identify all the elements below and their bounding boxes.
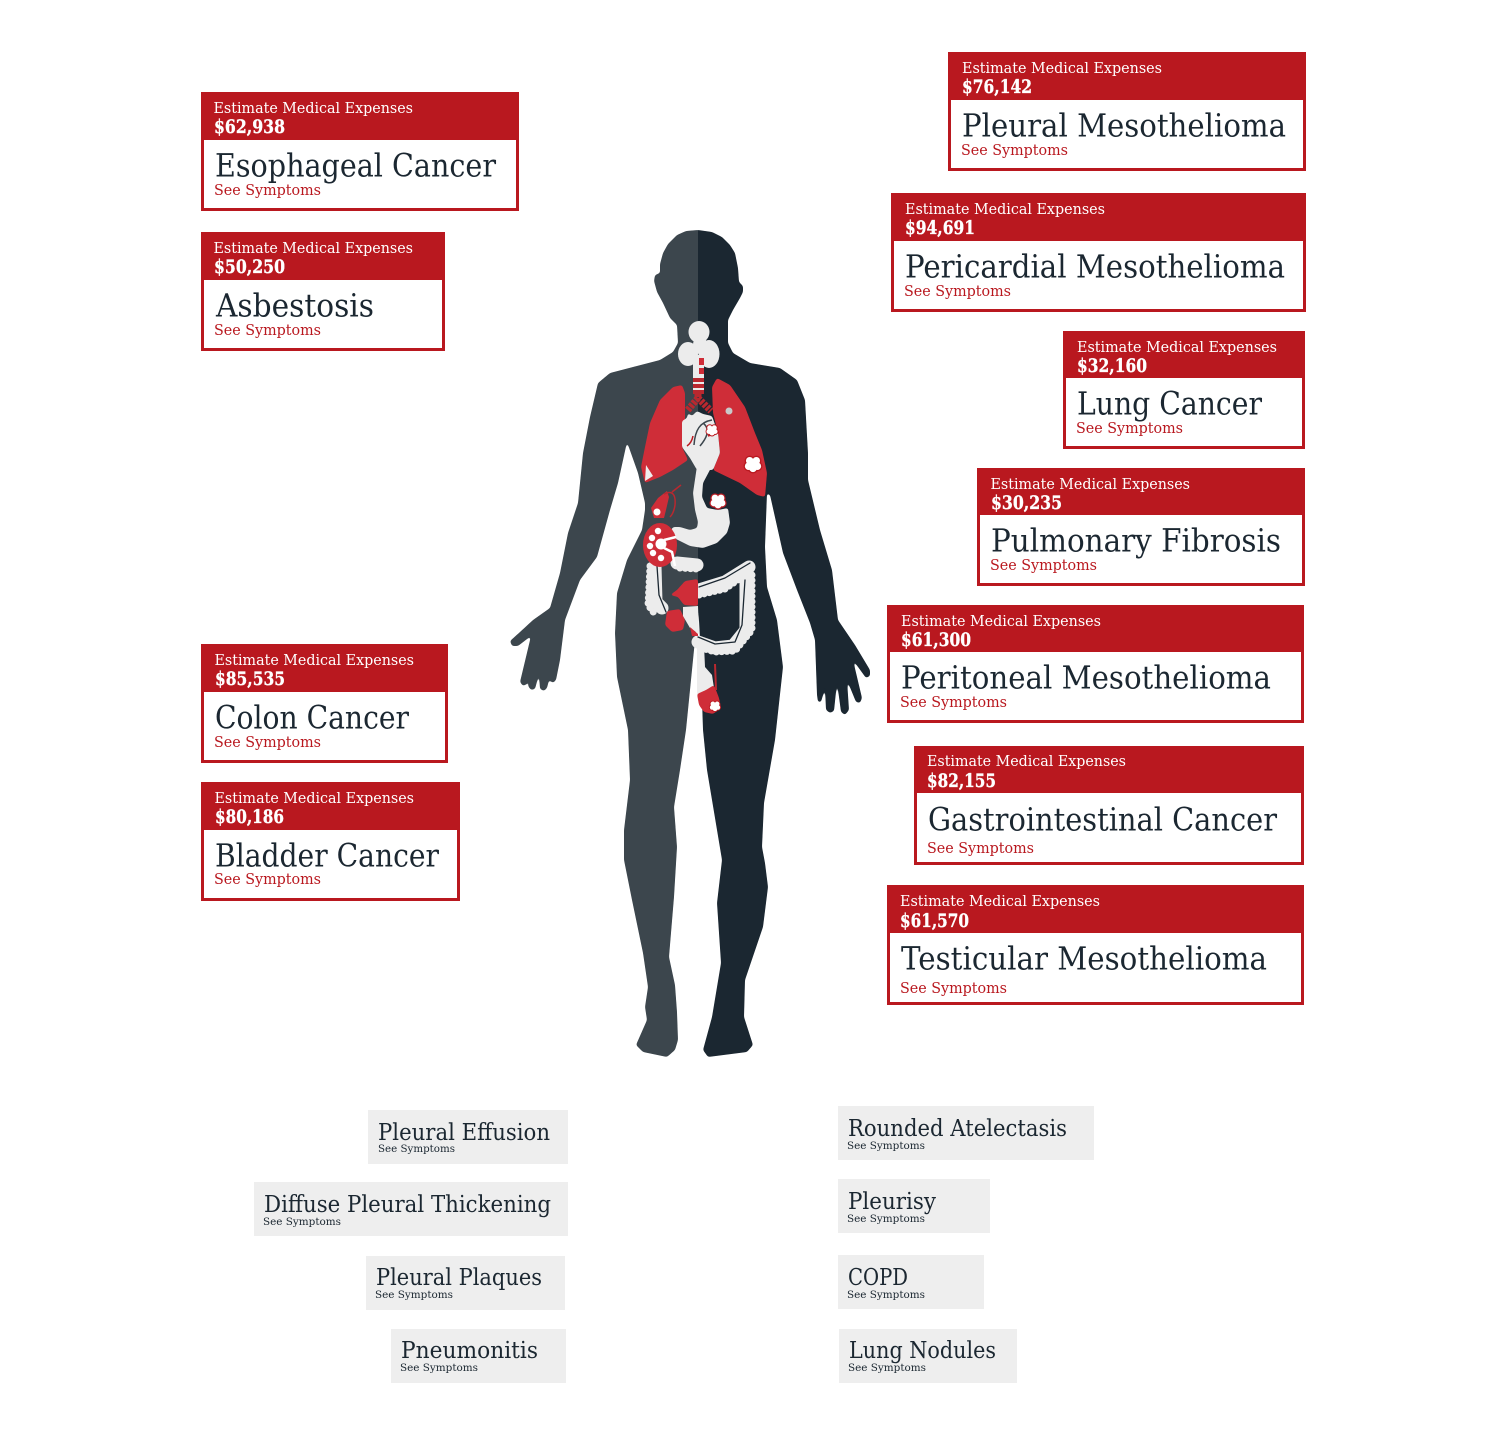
organ: heart [682,411,720,470]
card: Lung Cancer: See Symptoms [1076,421,1183,437]
organ: lung nodule dot [726,408,732,414]
card: Bladder Cancer [201,782,460,901]
card: Colon Cancer [201,644,448,763]
organ: stomach tumor [709,493,727,510]
card: Testicular Mesothelioma: Testicular Mesothelioma [901,942,1267,978]
card: Asbestosis: Asbestosis [215,288,374,324]
tag: Pneumonitis [391,1329,566,1383]
card: Pericardial Mesothelioma [891,193,1306,312]
card: Esophageal Cancer [201,92,519,211]
card: Colon Cancer: $85,535 [215,668,285,690]
organ: esophagus and stomach [668,466,730,548]
organ: gallbladder [651,485,681,518]
organ: thyroid [678,321,720,368]
card: Pericardial Mesothelioma: See Symptoms [904,284,1011,300]
organ: lung tumor [744,456,762,473]
tag: Lung Nodules: See Symptoms [848,1362,926,1374]
card: Asbestosis: $50,250 [214,256,285,278]
card: Testicular Mesothelioma: $61,570 [900,910,969,932]
organ: trachea [693,355,704,394]
tag: Rounded Atelectasis [838,1106,1094,1160]
tag: Pleurisy [838,1179,990,1233]
organ: left lung [641,385,688,483]
card: Pleural Mesothelioma: $76,142 [962,76,1032,98]
card: Pulmonary Fibrosis: $30,235 [991,492,1062,514]
card: Lung Cancer: $32,160 [1077,355,1147,377]
body: right half silhouette [698,230,870,1057]
organ: lower tract and testicle [697,640,721,714]
card: Asbestosis: See Symptoms [214,323,321,339]
card: Bladder Cancer: $80,186 [215,806,284,828]
card: Testicular Mesothelioma: Estimate Medical Expenses [900,894,1100,910]
card: Pleural Mesothelioma: Pleural Mesothelioma [962,108,1286,144]
card: Pericardial Mesothelioma: Estimate Medical Expenses [905,202,1105,218]
card: Lung Cancer: Estimate Medical Expenses [1077,340,1277,356]
tag: Pleural Effusion: Pleural Effusion [378,1118,550,1146]
tag: Pneumonitis: See Symptoms [400,1362,478,1374]
card: Esophageal Cancer: Esophageal Cancer [215,148,497,184]
tag: Pleural Plaques: Pleural Plaques [376,1263,542,1291]
organ: heart vessels [687,420,719,446]
tag: Diffuse Pleural Thickening [254,1182,568,1236]
tag: Lung Nodules [839,1329,1017,1383]
organ: heart tumor [706,424,718,436]
tag: COPD: See Symptoms [847,1289,925,1301]
card: Asbestosis: Estimate Medical Expenses [214,241,413,257]
card: Colon Cancer: Estimate Medical Expenses [214,653,414,669]
card: Pericardial Mesothelioma: $94,691 [905,217,975,239]
organ: bladder and intestine [665,579,699,636]
tag: Pneumonitis: Pneumonitis [401,1336,538,1364]
human body figure [510,230,870,1057]
card: Pulmonary Fibrosis: Estimate Medical Expenses [990,477,1190,493]
card: Pulmonary Fibrosis: See Symptoms [990,558,1097,574]
organ: bronchi [687,394,711,411]
body: left half silhouette [510,230,698,1057]
card: Gastrointestinal Cancer: Gastrointestinal Cancer [928,802,1278,838]
tag: Lung Nodules: Lung Nodules [849,1336,996,1364]
card: Colon Cancer: Colon Cancer [215,700,410,736]
tag: Rounded Atelectasis: See Symptoms [847,1140,925,1152]
organ: right lung [712,378,767,497]
card: Bladder Cancer: Estimate Medical Expenses [214,791,414,807]
card: Esophageal Cancer: See Symptoms [214,183,321,199]
organ: pleural effusion wedge [645,465,653,481]
card: Peritoneal Mesothelioma: Estimate Medical Expenses [901,614,1101,630]
tag: Pleural Effusion [368,1110,568,1164]
card: Pleural Mesothelioma [948,52,1306,171]
card: Pulmonary Fibrosis: Pulmonary Fibrosis [991,524,1281,560]
card: Peritoneal Mesothelioma: $61,300 [901,629,971,651]
tag: Diffuse Pleural Thickening: See Symptoms [263,1216,341,1228]
card: Bladder Cancer: Bladder Cancer [215,838,440,874]
tag: Pleurisy: Pleurisy [848,1187,937,1215]
card: Peritoneal Mesothelioma [887,605,1304,723]
card: Colon Cancer: See Symptoms [214,735,321,751]
card: Pericardial Mesothelioma: Pericardial Mesothelioma [905,250,1285,286]
card: Gastrointestinal Cancer: See Symptoms [927,841,1034,857]
card: Asbestosis [201,232,445,351]
card: Peritoneal Mesothelioma: Peritoneal Mesothelioma [901,660,1271,696]
tag: COPD [838,1255,984,1309]
card: Pleural Mesothelioma: See Symptoms [961,143,1068,159]
card: Gastrointestinal Cancer [914,746,1304,865]
tag: Diffuse Pleural Thickening: Diffuse Pleural Thickening [264,1190,551,1218]
tag: Pleurisy: See Symptoms [847,1213,925,1225]
card: Testicular Mesothelioma [887,885,1304,1005]
tag: Pleural Plaques: See Symptoms [375,1289,453,1301]
tag: Pleural Plaques [366,1256,565,1310]
card: Gastrointestinal Cancer: $82,155 [927,770,996,792]
card: Esophageal Cancer: Estimate Medical Expenses [214,101,413,117]
card: Bladder Cancer: See Symptoms [214,872,321,888]
card: Peritoneal Mesothelioma: See Symptoms [900,695,1007,711]
card: Testicular Mesothelioma: See Symptoms [900,981,1007,997]
card: Lung Cancer: Lung Cancer [1077,386,1263,422]
tag: Pleural Effusion: See Symptoms [378,1143,455,1155]
tag: Rounded Atelectasis: Rounded Atelectasis [848,1114,1067,1142]
tag: COPD: COPD [848,1263,908,1291]
organ: colon [648,563,752,652]
card: Esophageal Cancer: $62,938 [214,116,285,138]
card: Pulmonary Fibrosis [977,468,1305,586]
card: Gastrointestinal Cancer: Estimate Medical Expenses [927,754,1126,770]
card: Lung Cancer [1063,331,1305,449]
organ: kidney [643,523,677,567]
card: Pleural Mesothelioma: Estimate Medical Expenses [962,61,1162,77]
